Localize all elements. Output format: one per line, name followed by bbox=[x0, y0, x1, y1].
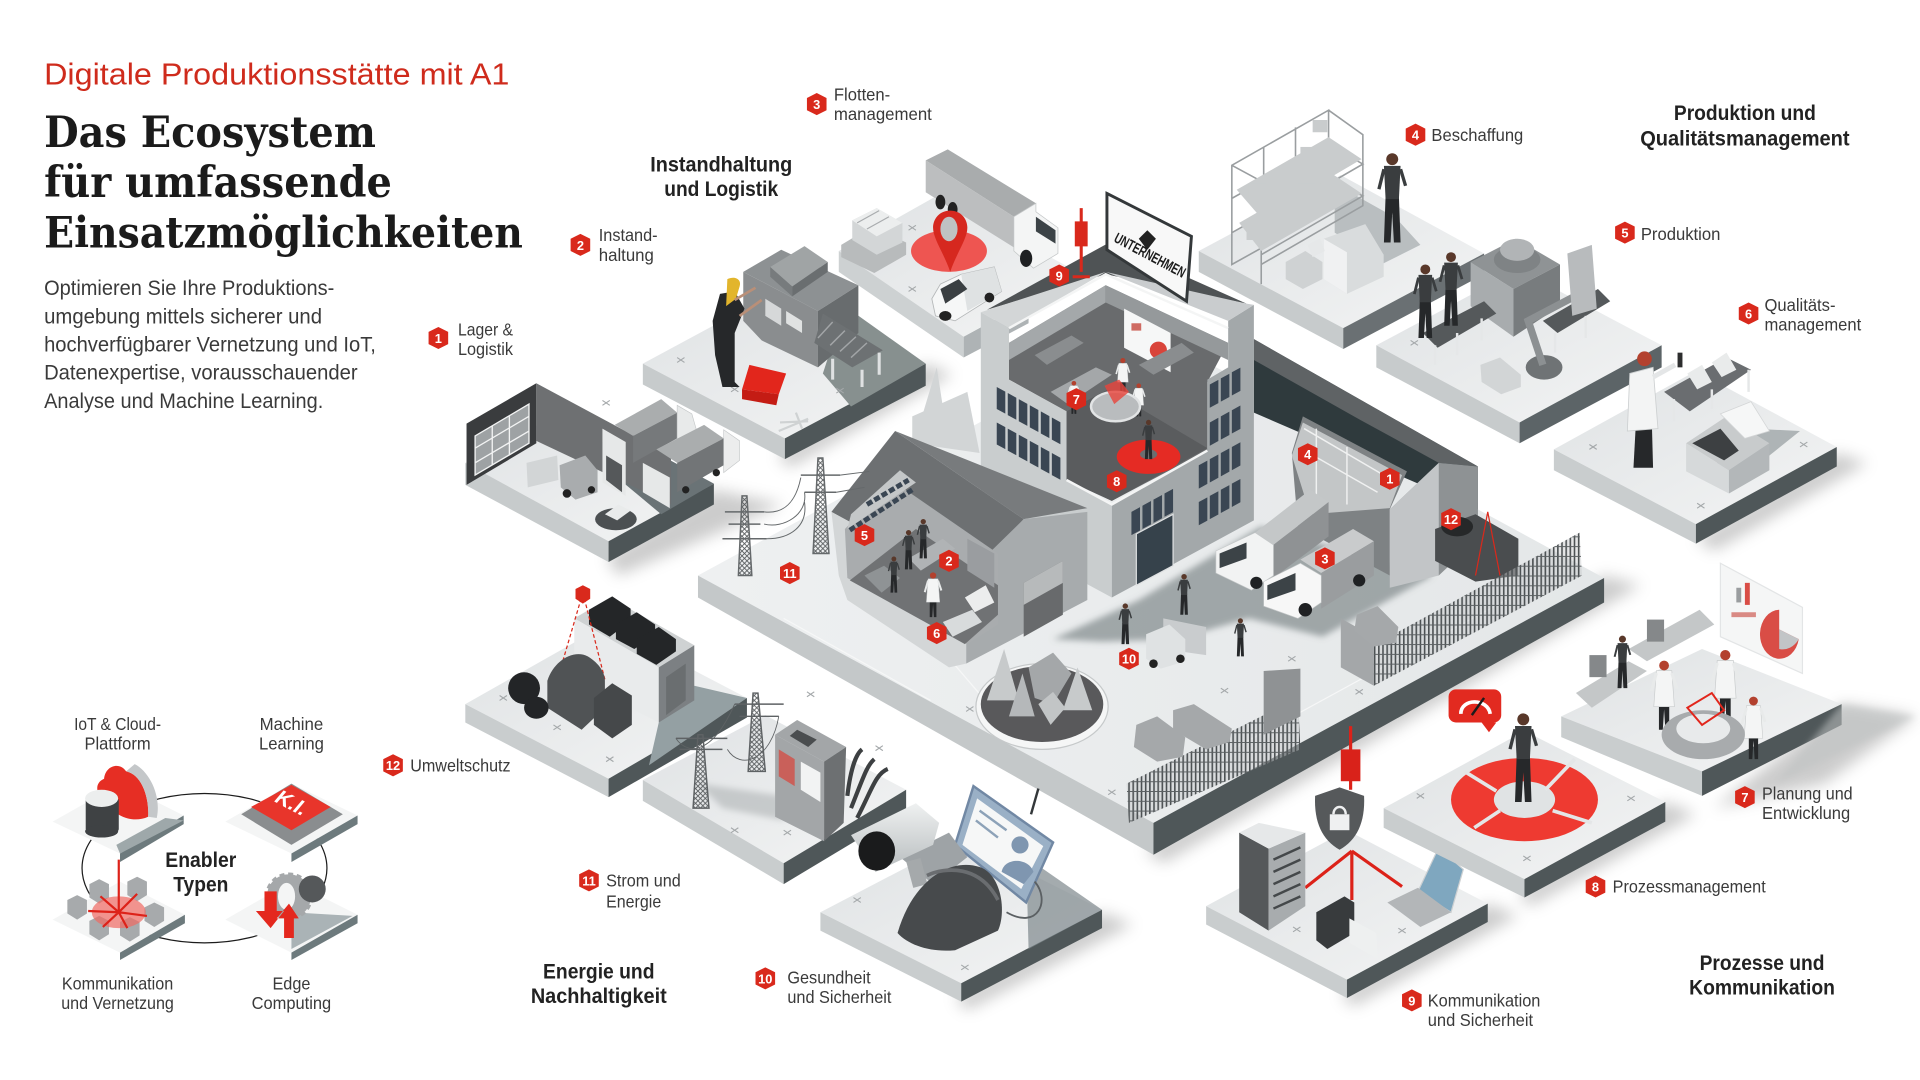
section heading: Instandhaltung und Logistik bbox=[650, 153, 792, 201]
scene number markers: 7 bbox=[1073, 392, 1080, 407]
section heading: Prozesse und Kommunikation: Prozesse und bbox=[1700, 952, 1824, 975]
icon: round table with red wireframe bbox=[1662, 693, 1745, 759]
label 1 Lager und Logistik: Lager & bbox=[458, 320, 514, 340]
icon: block with door bbox=[574, 598, 694, 722]
label 6 Qualitaetsmanagement: Qualitäts- bbox=[1764, 295, 1836, 315]
label 4 Beschaffung: Beschaffung bbox=[1431, 125, 1523, 145]
icon: machine bbox=[743, 246, 858, 367]
icon: delivery trucks bbox=[1216, 490, 1374, 618]
label: Kommunikation und Vernetzung: Kommunikation bbox=[62, 973, 173, 993]
icon: waste containers bbox=[508, 654, 632, 738]
label 10 Gesundheit und Sicherheit: Gesundheit bbox=[787, 967, 871, 987]
title: heading bbox=[44, 108, 523, 258]
label 11 Strom und Energie: 11 bbox=[582, 873, 596, 888]
label 7 Planung und Entwicklung: Entwicklung bbox=[1762, 803, 1850, 823]
label 2 Instandhaltung: 2 bbox=[577, 238, 584, 253]
heading: Enabler Typen bbox=[165, 849, 236, 896]
icon: small car bbox=[595, 504, 637, 530]
icon: ID tablet bbox=[955, 786, 1053, 918]
icon: conveyor with bottles bbox=[1664, 353, 1751, 421]
intro text block: umgebung mittels sicherer und bbox=[44, 304, 322, 328]
icon: PC tower and monitor bbox=[1316, 896, 1378, 959]
label 7 Planung und Entwicklung: 7 bbox=[1741, 790, 1748, 805]
title: subtitle: Digitale Produktionsstätte mit A1 bbox=[44, 57, 509, 91]
label 12 Umweltschutz bbox=[383, 754, 511, 776]
icon: K.I. chip bbox=[241, 784, 343, 845]
label: IoT und Cloud-Plattform bbox=[74, 714, 161, 753]
icon: truck bbox=[926, 149, 1058, 268]
icon: shield with lock bbox=[1315, 787, 1364, 850]
heading: Enabler Typen: Enabler bbox=[165, 849, 236, 872]
label 5 Produktion: Produktion bbox=[1641, 224, 1720, 244]
scene number markers: 12 bbox=[1444, 512, 1458, 527]
icon: cables bbox=[847, 749, 888, 818]
label 10 Gesundheit und Sicherheit: und Sicherheit bbox=[787, 987, 892, 1007]
label 6 Qualitaetsmanagement bbox=[1739, 295, 1861, 335]
panel: main factory platform bbox=[698, 193, 1604, 855]
label 9 Kommunikation und Sicherheit: und Sicherheit bbox=[1428, 1010, 1533, 1030]
scene number markers: 10 bbox=[1122, 652, 1136, 667]
panel: Gesundheit und Sicherheit platform bbox=[820, 786, 1102, 1002]
icon: red location pin bbox=[911, 211, 987, 272]
label 1 Lager und Logistik: Logistik bbox=[458, 339, 513, 359]
section heading: Prozesse und Kommunikation: Kommunikation bbox=[1689, 976, 1835, 999]
icon: surveillance camera bbox=[851, 803, 967, 888]
door bbox=[1136, 514, 1173, 585]
icon: fences bbox=[1127, 533, 1582, 823]
billboard bbox=[1107, 193, 1191, 301]
title: heading: Das Ecosystem bbox=[44, 108, 376, 158]
label 12 Umweltschutz: 12 bbox=[386, 758, 400, 773]
enabler tile: edge computing bbox=[225, 874, 358, 960]
label 6 Qualitaetsmanagement: management bbox=[1764, 315, 1861, 335]
icon: rooftop antenna bbox=[1073, 208, 1090, 277]
K.I. text: K.I. bbox=[270, 787, 313, 820]
red process disc with person bbox=[1117, 420, 1180, 474]
icon: red mast and tripod bbox=[1305, 726, 1402, 900]
chart board bbox=[1720, 563, 1802, 673]
icon: roof units bbox=[589, 596, 676, 665]
icon: wrenches bbox=[779, 413, 808, 431]
icon: network cubes bbox=[67, 877, 164, 942]
garage door bbox=[1024, 561, 1063, 637]
icon: laptop bbox=[1387, 847, 1463, 927]
icon: stacked boxes bbox=[1286, 224, 1384, 294]
label: Machine Learning: Machine bbox=[260, 714, 323, 734]
people in lab coats bbox=[1615, 636, 1765, 759]
icon: gears bbox=[267, 874, 326, 918]
label 9 Kommunikation und Sicherheit bbox=[1402, 989, 1540, 1030]
icon: red arrows bbox=[256, 891, 299, 938]
panel: Prozessmanagement platform bbox=[1384, 689, 1665, 898]
icon: sensor with red lines bbox=[562, 585, 605, 680]
section heading: Produktion und Qualitaetsmanagement: Qualitätsmanagement bbox=[1640, 128, 1850, 151]
label 3 Flottenmanagement: 3 bbox=[813, 97, 820, 112]
background trees behind hall bbox=[912, 367, 980, 453]
icon: red toolbox bbox=[742, 365, 786, 405]
scene number markers: 5 bbox=[861, 528, 868, 543]
section heading: Produktion und Qualitaetsmanagement: Produktion und bbox=[1674, 102, 1816, 125]
intro text block: Analyse und Machine Learning. bbox=[44, 389, 323, 413]
label 2 Instandhaltung: haltung bbox=[599, 245, 654, 265]
label 4 Beschaffung bbox=[1406, 124, 1523, 146]
icon: crate bbox=[1480, 358, 1521, 394]
hall equipment and workers bbox=[864, 519, 994, 637]
label: Machine Learning bbox=[259, 714, 324, 753]
icon: red cloud bbox=[97, 766, 148, 819]
label: Kommunikation und Vernetzung bbox=[61, 973, 174, 1013]
heading: Enabler Typen: Typen bbox=[173, 873, 228, 896]
enabler ring bbox=[82, 793, 327, 943]
intro text block: hochverfügbarer Vernetzung und IoT, bbox=[44, 332, 376, 356]
panel: Umweltschutz platform bbox=[465, 585, 747, 797]
panel: Planung und Entwicklung platform bbox=[1561, 563, 1916, 796]
label 7 Planung und Entwicklung bbox=[1735, 784, 1853, 823]
label 3 Flottenmanagement: management bbox=[834, 104, 932, 124]
scene number markers: 11 bbox=[783, 566, 797, 581]
label: IoT und Cloud-Plattform: Plattform bbox=[84, 733, 151, 753]
icon: warehouse wall with shelves bbox=[467, 383, 671, 508]
scene number markers: 9 bbox=[1056, 268, 1063, 283]
section heading: Energie und Nachhaltigkeit: Nachhaltigkeit bbox=[531, 985, 667, 1008]
icon: open crate bbox=[1686, 402, 1769, 493]
icon: circular garden with trees bbox=[976, 649, 1108, 749]
icon: red circular process ring bbox=[1451, 758, 1598, 841]
small desks and people bbox=[1035, 336, 1194, 416]
platform shadows bbox=[606, 364, 1916, 1010]
enabler tile: communication bbox=[53, 860, 185, 960]
label 3 Flottenmanagement bbox=[807, 84, 932, 124]
icon: red gauge speech bubble bbox=[1449, 689, 1501, 732]
scene number markers: 1 bbox=[1386, 472, 1393, 487]
scene number markers: 3 bbox=[1321, 551, 1328, 566]
section heading: Instandhaltung und Logistik: Instandhaltung bbox=[650, 153, 792, 176]
icon: workers bbox=[1414, 252, 1462, 338]
panel: Produktion platform bbox=[1376, 239, 1662, 443]
icon: worker with tablet bbox=[1379, 153, 1406, 242]
scene number markers: 2 bbox=[945, 554, 953, 569]
icon: parked cars bbox=[1134, 606, 1398, 762]
section heading: Instandhaltung und Logistik: und Logistik bbox=[664, 178, 779, 201]
windows bbox=[997, 368, 1240, 535]
icon: conveyor belt bbox=[1423, 289, 1610, 365]
building: office tower bbox=[981, 193, 1254, 598]
label 7 Planung und Entwicklung: Planung und bbox=[1762, 784, 1853, 804]
title: heading: für umfassende bbox=[44, 158, 392, 208]
icon: inspector in white coat bbox=[1627, 351, 1682, 468]
label 9 Kommunikation und Sicherheit: 9 bbox=[1408, 993, 1415, 1008]
label: IoT und Cloud-Plattform: IoT & Cloud- bbox=[74, 714, 161, 734]
icon: red antenna with star links bbox=[88, 860, 147, 928]
scene number markers bbox=[780, 264, 1461, 670]
label 5 Produktion bbox=[1615, 222, 1720, 244]
section heading: Produktion und Qualitaetsmanagement bbox=[1640, 102, 1850, 151]
label: Edge Computing: Computing bbox=[252, 993, 331, 1013]
icon: forklift and workers bbox=[1119, 574, 1246, 669]
building: production hall bbox=[831, 431, 1087, 667]
billboard: UNTERNEHMEN bbox=[1111, 231, 1188, 282]
label 11 Strom und Energie: Strom und bbox=[606, 871, 681, 891]
panel: Kommunikation und Sicherheit platform bbox=[1206, 726, 1488, 998]
icon: pylons bbox=[676, 693, 784, 808]
scene number markers: 8 bbox=[1113, 474, 1120, 489]
panel: Instandhaltung platform bbox=[643, 246, 926, 459]
label 6 Qualitaetsmanagement: 6 bbox=[1745, 306, 1752, 321]
panel: Beschaffung platform bbox=[1199, 110, 1484, 349]
panel: Strom und Energie platform bbox=[643, 693, 906, 884]
scene number markers: 6 bbox=[933, 626, 940, 641]
warehouse building at right bbox=[1254, 339, 1518, 588]
label: Edge Computing bbox=[252, 973, 331, 1013]
icon: server racks bbox=[1239, 823, 1305, 931]
panel: Flottenmanagement platform bbox=[839, 149, 1078, 358]
icon: technician with yellow hair bbox=[713, 278, 762, 387]
icon: rooftop bins and antenna bbox=[1435, 512, 1518, 582]
icon: trucks bbox=[615, 399, 740, 493]
icon: white van bbox=[932, 267, 1002, 321]
label 12 Umweltschutz: Umweltschutz bbox=[410, 755, 511, 775]
label 2 Instandhaltung: Instand- bbox=[599, 225, 658, 245]
intro text block bbox=[44, 276, 376, 413]
icon: power cabinet bbox=[775, 720, 846, 841]
label 2 Instandhaltung bbox=[571, 225, 658, 265]
intro text block: Datenexpertise, vorausschauender bbox=[44, 361, 358, 385]
icon: hard hat bbox=[898, 865, 1002, 951]
label 4 Beschaffung: 4 bbox=[1412, 128, 1420, 143]
label 8 Prozessmanagement: 8 bbox=[1592, 879, 1599, 894]
icon: database bbox=[85, 790, 119, 838]
icon: robot arm bbox=[1526, 245, 1597, 380]
title: heading: Einsatzmöglichkeiten bbox=[44, 208, 523, 258]
label 11 Strom und Energie bbox=[579, 869, 681, 911]
label 3 Flottenmanagement: Flotten- bbox=[834, 84, 890, 104]
section heading: Prozesse und Kommunikation bbox=[1689, 952, 1835, 999]
label: Edge Computing: Edge bbox=[272, 973, 310, 993]
icon: forklift with pallet bbox=[527, 456, 598, 500]
presentation board bbox=[1124, 309, 1171, 372]
icon: pylons on main platform bbox=[722, 458, 869, 576]
label 5 Produktion: 5 bbox=[1621, 226, 1628, 241]
label 1 Lager und Logistik bbox=[429, 320, 514, 359]
label: Machine Learning: Learning bbox=[259, 733, 324, 753]
desks and monitors bbox=[1576, 610, 1714, 708]
icon: manager with phone bbox=[1510, 713, 1536, 802]
scene number markers: 4 bbox=[1304, 447, 1312, 462]
enabler tile: IoT and cloud bbox=[53, 764, 184, 862]
label 10 Gesundheit und Sicherheit: 10 bbox=[758, 971, 772, 986]
intro text block: Optimieren Sie Ihre Produktions- bbox=[44, 276, 334, 300]
round table with red wireframe bbox=[1091, 380, 1140, 421]
label 9 Kommunikation und Sicherheit: Kommunikation bbox=[1428, 991, 1540, 1011]
label 8 Prozessmanagement: Prozessmanagement bbox=[1613, 877, 1766, 897]
panel: Lager und Logistik platform bbox=[465, 383, 740, 562]
label 10 Gesundheit und Sicherheit bbox=[756, 967, 892, 1007]
label: Kommunikation und Vernetzung: und Vernetzung bbox=[61, 993, 174, 1013]
label 1 Lager und Logistik: 1 bbox=[435, 331, 442, 346]
icon: storage shelf bbox=[1232, 110, 1363, 284]
icon: conveyor bbox=[814, 313, 883, 387]
panel: Qualitaetsmanagement platform bbox=[1554, 351, 1837, 544]
icon: press machine bbox=[1471, 239, 1560, 337]
icon: pallet with boxes bbox=[841, 208, 906, 273]
enabler tile: machine learning bbox=[225, 784, 358, 862]
section heading: Energie und Nachhaltigkeit bbox=[531, 960, 667, 1008]
label 11 Strom und Energie: Energie bbox=[606, 891, 661, 911]
section heading: Energie und Nachhaltigkeit: Energie und bbox=[543, 960, 654, 983]
